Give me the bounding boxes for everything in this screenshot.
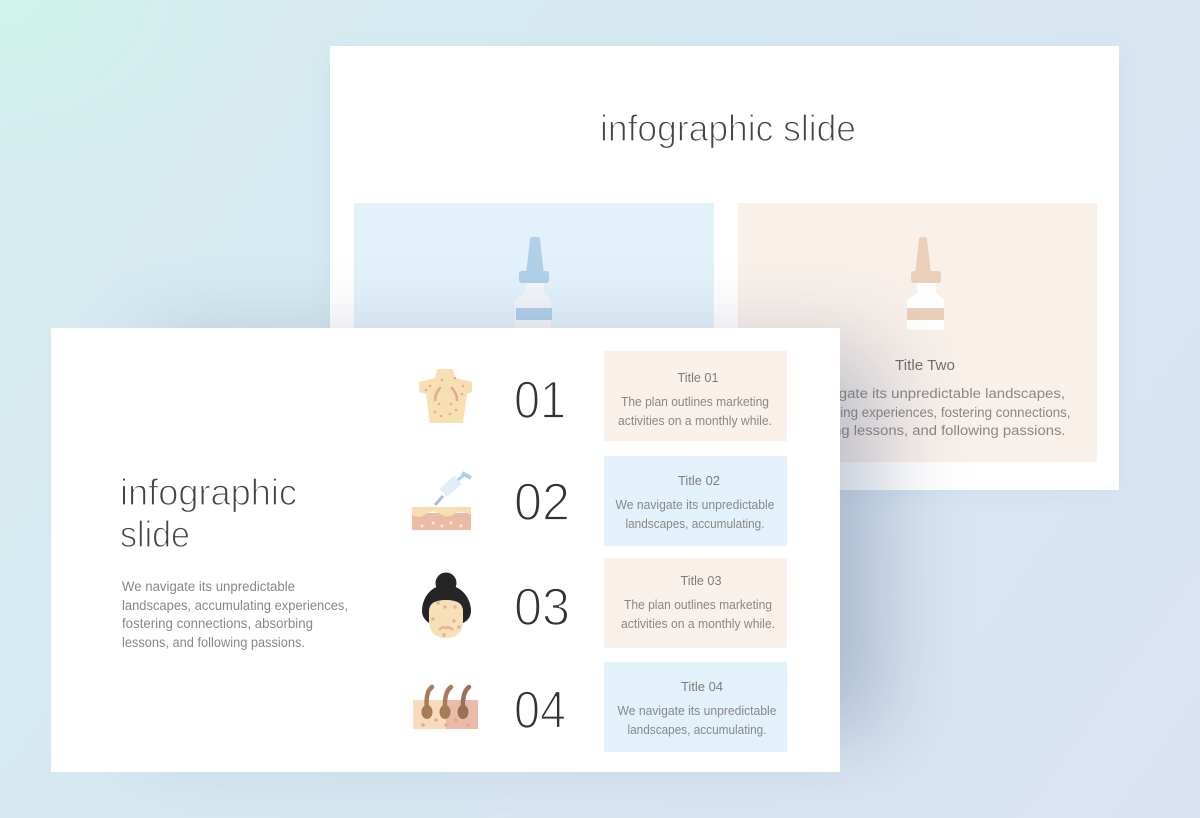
box 01 text: Title 01 xyxy=(678,370,718,385)
title two body text xyxy=(780,386,1070,438)
box 04 text: We navigate its unpredictable xyxy=(618,704,777,718)
title two body text: We navigate its unpredictable landscapes, xyxy=(785,386,1065,401)
numbers 01 to 04: 01 xyxy=(514,371,566,430)
box 04 text: Title 04 xyxy=(681,679,723,694)
numbers 01 to 04: 04 xyxy=(514,681,566,740)
numbers 01 to 04 xyxy=(514,371,570,740)
panel: title one card xyxy=(354,203,714,462)
box 03 text xyxy=(621,573,775,631)
panel: front slide xyxy=(51,328,840,772)
panel: back slide xyxy=(330,46,1119,490)
numbers 01 to 04: 02 xyxy=(514,473,570,532)
back slide title: infographic slide xyxy=(600,108,856,149)
intro paragraph: lessons, and following passions. xyxy=(122,635,305,650)
box 02 text: landscapes, accumulating. xyxy=(626,517,764,531)
box 03 text: activities on a monthly while. xyxy=(621,617,775,631)
box 04 text: landscapes, accumulating. xyxy=(628,723,766,737)
box 02 text xyxy=(616,473,775,531)
main heading xyxy=(120,472,297,555)
info box 03 xyxy=(604,558,787,648)
intro paragraph: landscapes, accumulating experiences, xyxy=(122,598,348,613)
box 02 text: We navigate its unpredictable xyxy=(616,498,775,512)
box 04 text xyxy=(618,679,777,737)
panel: title two card xyxy=(738,203,1097,462)
box 03 text: The plan outlines marketing xyxy=(624,598,772,612)
icon: back with acne xyxy=(419,369,472,423)
numbers 01 to 04: 03 xyxy=(514,578,570,637)
title two body text: absorbing lessons, and following passions. xyxy=(784,423,1066,438)
box 01 text: activities on a monthly while. xyxy=(618,414,772,428)
title two body text: accumulating experiences, fostering connections, xyxy=(780,405,1070,420)
box 03 text: Title 03 xyxy=(680,573,722,588)
title two content xyxy=(780,237,1070,438)
title two heading: Title Two xyxy=(895,357,955,374)
icon: face with bun hair xyxy=(422,572,471,638)
box 02 text: Title 02 xyxy=(678,473,720,488)
box 01 text xyxy=(618,370,772,428)
info box 04 xyxy=(604,662,787,752)
icon: skin with hair follicles xyxy=(413,687,478,729)
icon: blue dropper bottle xyxy=(515,237,552,328)
front slide content xyxy=(120,369,777,740)
info box 01 xyxy=(604,351,787,441)
intro paragraph: We navigate its unpredictable xyxy=(122,579,295,594)
main heading: infographic xyxy=(120,472,297,513)
icon: syringe and skin layer xyxy=(412,473,471,530)
box 01 text: The plan outlines marketing xyxy=(621,395,769,409)
main heading: slide xyxy=(120,514,190,555)
icon: peach dropper bottle xyxy=(907,237,944,330)
intro paragraph: fostering connections, absorbing xyxy=(122,616,313,631)
info box 02 xyxy=(604,456,787,546)
intro paragraph xyxy=(122,579,348,650)
